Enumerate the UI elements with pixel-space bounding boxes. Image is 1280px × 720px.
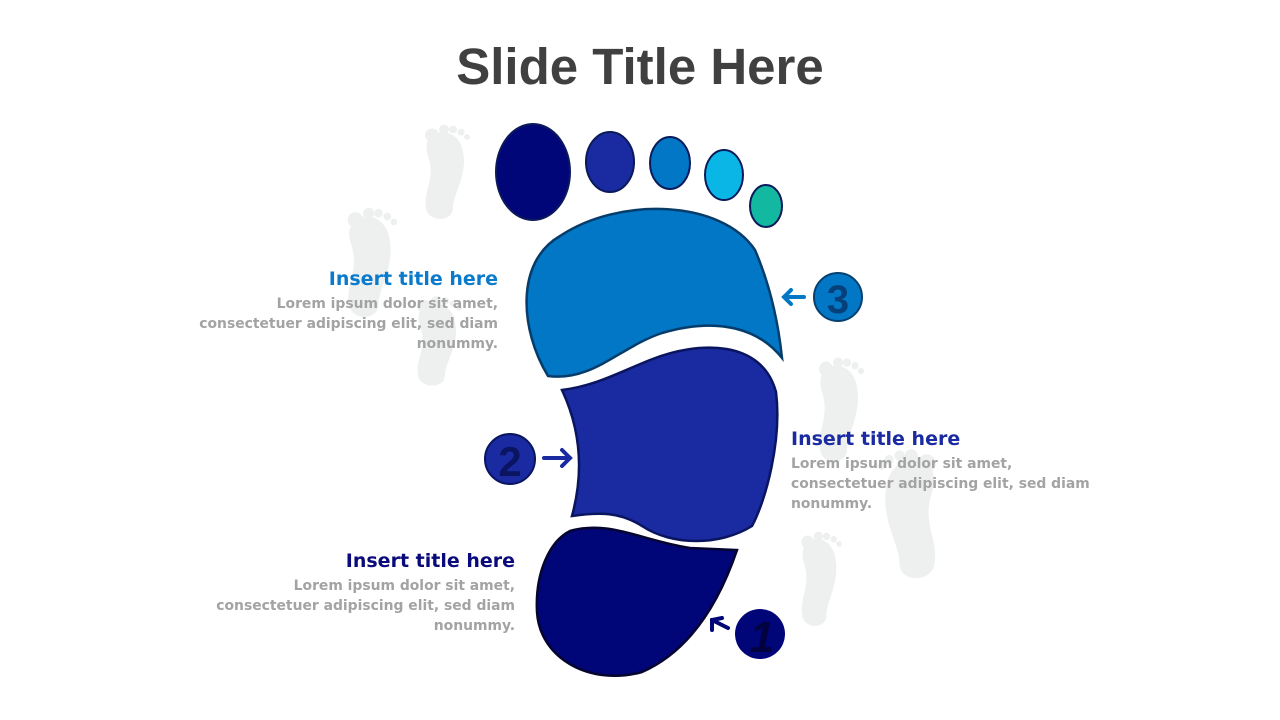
text block 1: nonummy. bbox=[434, 618, 515, 634]
text block 2 bbox=[791, 428, 1090, 512]
text block 2: Insert title here bbox=[791, 428, 960, 450]
text block 2: consectetuer adipiscing elit, sed diam bbox=[791, 476, 1090, 492]
section 1 heel bbox=[537, 528, 737, 676]
marker 2: 2 bbox=[498, 438, 522, 485]
marker 3: 3 bbox=[827, 278, 849, 322]
toes bbox=[496, 124, 782, 227]
marker 1: 1 bbox=[750, 613, 774, 662]
text block 1: Insert title here bbox=[346, 550, 515, 572]
marker 1 bbox=[712, 609, 785, 662]
section 3 ball bbox=[527, 209, 782, 377]
text block 3: nonummy. bbox=[417, 336, 498, 352]
text block 3: Insert title here bbox=[329, 268, 498, 290]
text block 3 bbox=[199, 268, 498, 352]
title: Slide Title Here bbox=[456, 38, 824, 95]
faint footprints bbox=[348, 125, 936, 626]
text block 2: Lorem ipsum dolor sit amet, bbox=[791, 456, 1012, 472]
section 2 arch bbox=[562, 348, 777, 541]
marker 2 bbox=[485, 434, 570, 485]
text block 1: Lorem ipsum dolor sit amet, bbox=[294, 578, 515, 594]
marker 3 bbox=[784, 273, 862, 322]
text block 3: consectetuer adipiscing elit, sed diam bbox=[199, 316, 498, 332]
text block 3: Lorem ipsum dolor sit amet, bbox=[277, 296, 498, 312]
text block 1: consectetuer adipiscing elit, sed diam bbox=[216, 598, 515, 614]
text block 1 bbox=[216, 550, 515, 634]
text block 2: nonummy. bbox=[791, 496, 872, 512]
